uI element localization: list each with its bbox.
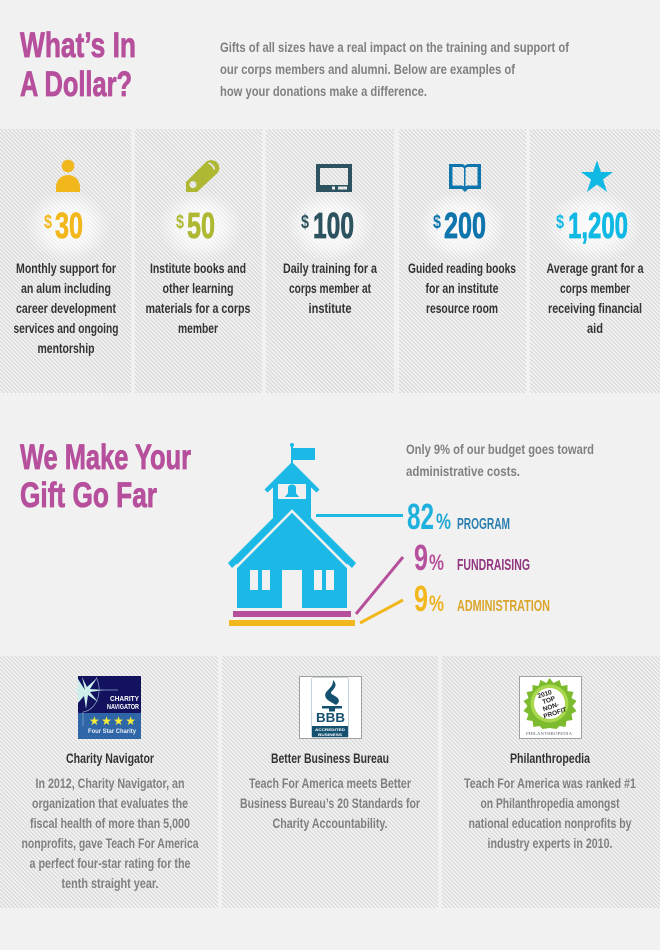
- description: $50: materials for a corps: [146, 301, 250, 316]
- amount: $30: [44, 205, 83, 246]
- description: $50: member: [178, 321, 219, 336]
- stat: 9% administration: ADMINISTRATION: [457, 598, 550, 615]
- logo: Philanthropedia: PROFIT: [543, 706, 568, 720]
- amount: $100: $: [301, 212, 309, 233]
- heading: We Make Your Gift Go Far: We Make Your: [20, 438, 191, 477]
- icon: star: [581, 160, 613, 192]
- amount: $1,200: [556, 205, 628, 246]
- intro text block: Gifts of all sizes have a real impact on the training and support of: [220, 39, 569, 55]
- amount: $200: $: [433, 212, 441, 233]
- budget note: administrative costs.: [406, 463, 520, 479]
- description: $1,200: [546, 261, 644, 336]
- stat: 82% program: PROGRAM: [457, 516, 510, 533]
- description: $30: Monthly support for: [16, 261, 117, 276]
- description: $1,200: aid: [587, 321, 603, 336]
- intro text block: how your donations make a difference.: [220, 83, 427, 99]
- icon: pencil tag: [186, 160, 219, 192]
- description: Charity Navigator: organization that evaluates the: [32, 795, 188, 811]
- description: Charity Navigator: In 2012, Charity Navigator, an: [36, 775, 184, 791]
- amount: $100: 100: [313, 205, 354, 246]
- amount: $50: [176, 205, 215, 246]
- description: $50: Institute books and: [150, 261, 246, 276]
- description: Charity Navigator: fiscal health of more than 5,000: [30, 815, 190, 831]
- description: $50: [146, 261, 250, 336]
- amount: $100: [301, 205, 354, 246]
- panel: $50: [135, 129, 262, 393]
- amount: $50: 50: [187, 205, 215, 246]
- stat: 9% administration: [414, 578, 550, 619]
- stat: 9% fundraising: %: [429, 550, 444, 575]
- stat: 9% fundraising: [414, 537, 530, 578]
- icon: screen: [316, 164, 352, 192]
- stat: 9% administration: %: [429, 591, 444, 616]
- amount: $30: 30: [55, 205, 83, 246]
- name: Charity Navigator: Charity Navigator: [66, 751, 155, 766]
- amount: $1,200: 1,200: [568, 205, 628, 246]
- logo: Philanthropedia: NON-: [542, 701, 560, 713]
- heading: We Make Your Gift Go Far: [20, 438, 191, 515]
- description: $30: [14, 261, 118, 356]
- stat: 9% fundraising: 9: [414, 537, 428, 578]
- panel: $100: [266, 129, 394, 393]
- panel: Philanthropedia: [442, 656, 660, 908]
- logo: Philanthropedia: PHILANTHROPEDIA: [526, 731, 573, 736]
- description: $50: other learning: [162, 281, 234, 296]
- title: What's In A Dollar: [20, 26, 136, 104]
- panel: $1,200: [530, 129, 660, 393]
- logo: Charity Navigator: NAVIGATOR: [107, 702, 139, 711]
- icon: person: [56, 160, 80, 192]
- description: $30: mentorship: [38, 341, 94, 356]
- amount: $200: [433, 205, 486, 246]
- description: Charity Navigator: a perfect four-star rating for the: [30, 855, 191, 871]
- amount: $1,200: $: [556, 212, 564, 233]
- logo: Charity Navigator: [76, 676, 141, 739]
- description: Charity Navigator: tenth straight year.: [62, 875, 158, 891]
- logo: BBB: [300, 676, 362, 738]
- intro text block: [220, 39, 569, 99]
- logo: Charity Navigator: CHARITY: [110, 694, 139, 703]
- stat: 82% program: %: [436, 509, 451, 534]
- logo: BBB: BUSINESS: [318, 733, 343, 737]
- description: $100: Daily training for a: [283, 261, 377, 276]
- description: $200: [408, 261, 516, 316]
- icon: schoolhouse: [228, 443, 356, 626]
- description: Philanthropedia: industry experts in 2010.: [488, 835, 612, 851]
- amount: $30: $: [44, 212, 52, 233]
- panel: $200: [399, 129, 526, 393]
- stat: 82% program: 82: [407, 496, 434, 537]
- name: Better Business Bureau: Better Business Bureau: [271, 751, 389, 766]
- logo: BBB: BBB: [316, 711, 345, 725]
- budget note: [406, 441, 594, 479]
- description: Charity Navigator: [22, 775, 199, 891]
- amount: $200: 200: [444, 205, 486, 246]
- logo: Philanthropedia: [520, 676, 582, 738]
- title: What's In A Dollar: A Dollar?: [20, 65, 132, 104]
- description: Better Business Bureau: Business Bureau’s 20 Standards for: [240, 795, 420, 811]
- description: $200: Guided reading books: [408, 261, 516, 276]
- description: $100: [283, 261, 377, 316]
- logo: Philanthropedia: TOP: [542, 695, 557, 706]
- description: $30: services and ongoing: [14, 321, 118, 336]
- logo: BBB: ACCREDITED: [315, 728, 345, 732]
- budget note: Only 9% of our budget goes toward: [406, 441, 594, 457]
- logo: Philanthropedia: 2010: [537, 689, 553, 700]
- description: $200: resource room: [426, 301, 498, 316]
- stat: 9% fundraising: FUNDRAISING: [457, 557, 530, 574]
- panel: Better Business Bureau: [222, 656, 438, 908]
- description: $30: career development: [16, 301, 116, 316]
- logo: Charity Navigator: ★★★★: [89, 714, 136, 728]
- heading: We Make Your Gift Go Far: Gift Go Far: [20, 476, 157, 515]
- description: $200: for an institute: [426, 281, 499, 296]
- name: Philanthropedia: Philanthropedia: [510, 751, 590, 766]
- icon: open book: [449, 164, 481, 192]
- description: Better Business Bureau: Teach For America meets Better: [249, 775, 411, 791]
- logo: Charity Navigator: Four Star Charity: [88, 729, 137, 735]
- description: Philanthropedia: [464, 775, 636, 851]
- panel: $30: [0, 129, 131, 393]
- amount: $50: $: [176, 212, 184, 233]
- description: $100: corps member at: [289, 281, 371, 296]
- description: $100: institute: [308, 301, 352, 316]
- description: $1,200: corps member: [560, 281, 631, 296]
- panel: Charity Navigator: [0, 656, 218, 908]
- stat: 9% administration: 9: [414, 578, 428, 619]
- description: Better Business Bureau: [240, 775, 420, 831]
- intro text block: our corps members and alumni. Below are examples of: [220, 61, 515, 77]
- description: $30: an alum including: [21, 281, 111, 296]
- description: Charity Navigator: nonprofits, gave Teach For America: [22, 835, 199, 851]
- connector lines: [316, 516, 403, 623]
- description: Better Business Bureau: Charity Accountability.: [272, 815, 388, 831]
- title: What's In A Dollar: What’s In: [20, 26, 136, 65]
- stat: 82% program: [407, 496, 510, 537]
